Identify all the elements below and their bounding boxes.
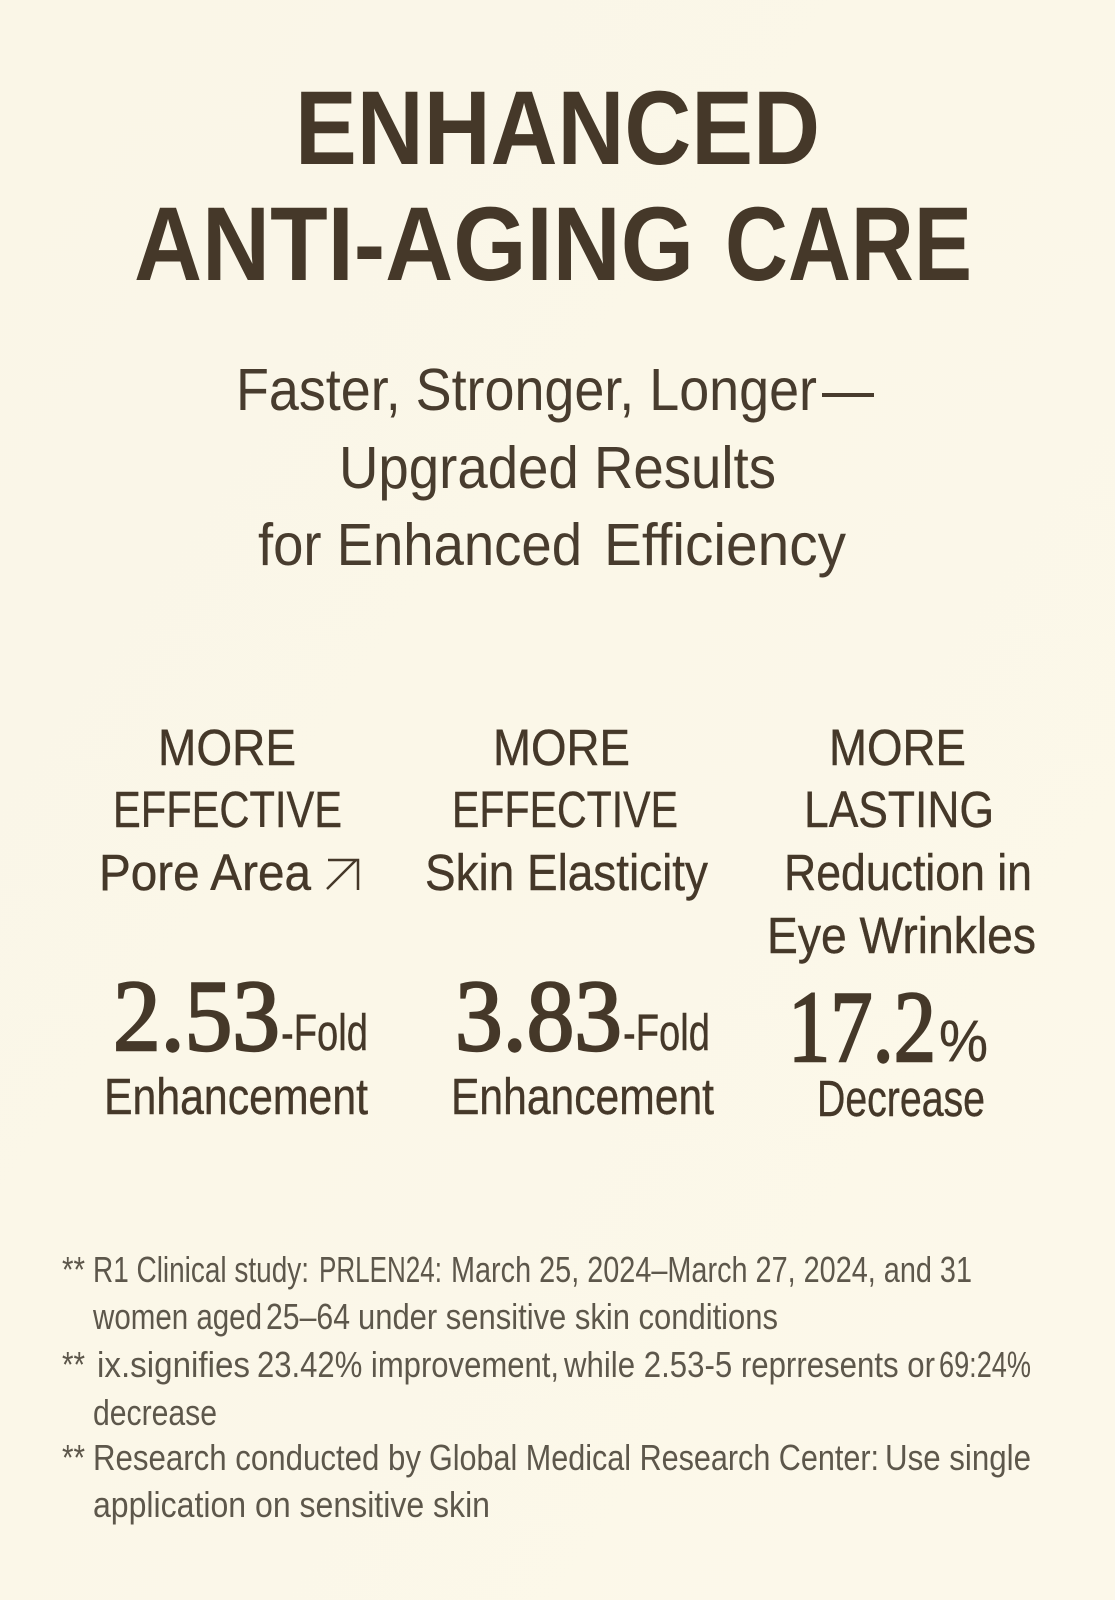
label: enhancement: Enhancement (104, 1068, 368, 1125)
footnote 2: 69:24% (939, 1344, 1031, 1385)
value: 2.53-fold: 2.53 (113, 960, 280, 1073)
subtitle: Upgraded Results (339, 435, 776, 501)
heading: more effective pore area: MORE (158, 719, 296, 776)
subtitle: for Enhanced (258, 512, 582, 578)
footnote 3: ** (62, 1437, 85, 1478)
value: 3.83-fold: -Fold (623, 1004, 710, 1061)
panel: eye wrinkles stat (767, 719, 1036, 1127)
footnote 2: while 2.53-5 reprresents or (563, 1344, 935, 1385)
footnote 2 (62, 1344, 1031, 1433)
label: enhancement: Enhancement (451, 1068, 714, 1125)
title: ANTI-AGING (134, 186, 694, 303)
value: 2.53-fold: -Fold (281, 1004, 368, 1061)
footnote 1: under sensitive skin conditions (358, 1296, 778, 1337)
footnote 2: ix.signifies (97, 1344, 250, 1385)
title: ENHANCED (295, 70, 820, 187)
heading: more effective skin elasticity (425, 719, 708, 901)
footnote 1: ** (62, 1249, 85, 1290)
heading: more effective pore area: Pore Area (99, 844, 312, 901)
panel: pore area stat (99, 719, 368, 1125)
footnote 1: 25–64 (266, 1296, 350, 1337)
footnote 1 (62, 1249, 972, 1337)
footnote 1: PRLEN24: (319, 1249, 442, 1290)
heading: more effective skin elasticity: Skin Elasticity (425, 844, 708, 901)
heading: more effective skin elasticity: MORE (493, 719, 630, 776)
footnote 3 (62, 1437, 1031, 1525)
icon: arrow up-right (327, 860, 358, 890)
footnote 3: Global Medical Research Center: (429, 1437, 879, 1478)
footnote 2: decrease (93, 1392, 217, 1433)
subtitle: Efficiency (604, 512, 846, 578)
heading: more lasting reduction in eye wrinkles: Reduction in (784, 844, 1032, 901)
subtitle: Faster, Stronger, Longer (236, 357, 817, 423)
heading: more lasting reduction in eye wrinkles (767, 719, 1036, 964)
value: 3.83-fold: 3.83 (455, 960, 622, 1073)
label: decrease: Decrease (817, 1070, 985, 1127)
heading: more lasting reduction in eye wrinkles: Eye Wrinkles (767, 907, 1036, 964)
subtitle: — (822, 357, 874, 423)
heading: more effective pore area (99, 719, 342, 901)
footnote 3: Research conducted by (93, 1437, 421, 1478)
heading: more effective pore area: EFFECTIVE (113, 781, 342, 838)
footnote 3: application on sensitive skin (93, 1484, 490, 1525)
footnote 1: March 25, 2024–March 27, 2024, and 31 (451, 1249, 972, 1290)
footnote 1: women aged (92, 1296, 262, 1337)
footnote 2: ** (62, 1344, 85, 1385)
footnote 3: Use single (885, 1437, 1031, 1478)
footnote 2: 23.42% improvement, (257, 1344, 559, 1385)
value: 17.2 percent: 17.2 (788, 971, 936, 1084)
heading: more lasting reduction in eye wrinkles: MORE (829, 719, 966, 776)
panel: skin elasticity stat (425, 719, 714, 1125)
footnotes (62, 1249, 1031, 1525)
footnote 1: R1 Clinical study: (93, 1249, 309, 1290)
value: 17.2 percent: % (939, 1009, 988, 1074)
subtitle (236, 357, 874, 578)
title: CARE (725, 186, 972, 303)
heading: more lasting reduction in eye wrinkles: LASTING (804, 781, 994, 838)
heading: more effective skin elasticity: EFFECTIVE (452, 781, 678, 838)
title (134, 70, 972, 303)
